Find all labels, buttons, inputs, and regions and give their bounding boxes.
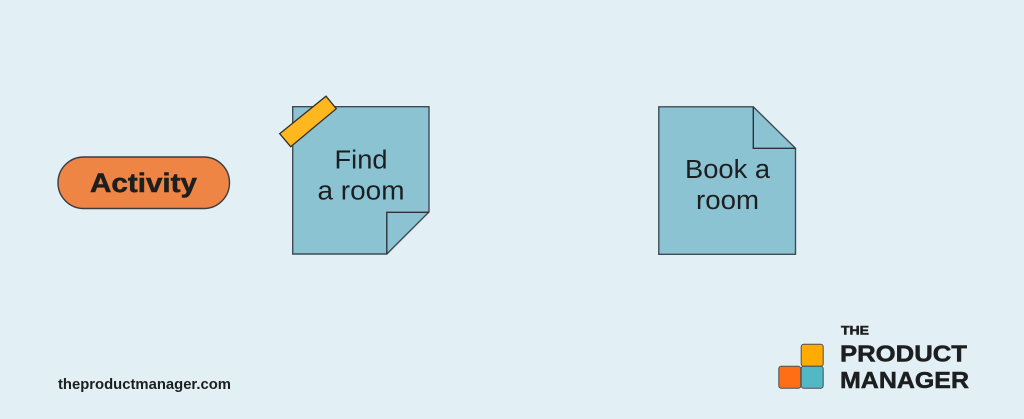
note text: Find: [334, 146, 388, 174]
logo: PRODUCT: [840, 340, 967, 366]
logo: [779, 324, 969, 393]
sticky note: find a room: a room: [318, 178, 404, 206]
logo wordmark: THE: [841, 324, 869, 338]
website url: theproductmanager.com: [58, 376, 231, 393]
activity pill: [58, 157, 230, 208]
activity pill: Activity: [90, 168, 197, 198]
folded corner: [387, 212, 429, 254]
logo: MANAGER: [840, 367, 969, 393]
sticky note: book a room: [659, 107, 796, 254]
folded corner: [753, 107, 796, 148]
note text: Book a: [685, 156, 771, 184]
sticky note: book a room: room: [696, 187, 759, 215]
logo blocks: [779, 344, 823, 388]
tape: [280, 96, 336, 147]
sticky note: find a room: [280, 96, 429, 254]
